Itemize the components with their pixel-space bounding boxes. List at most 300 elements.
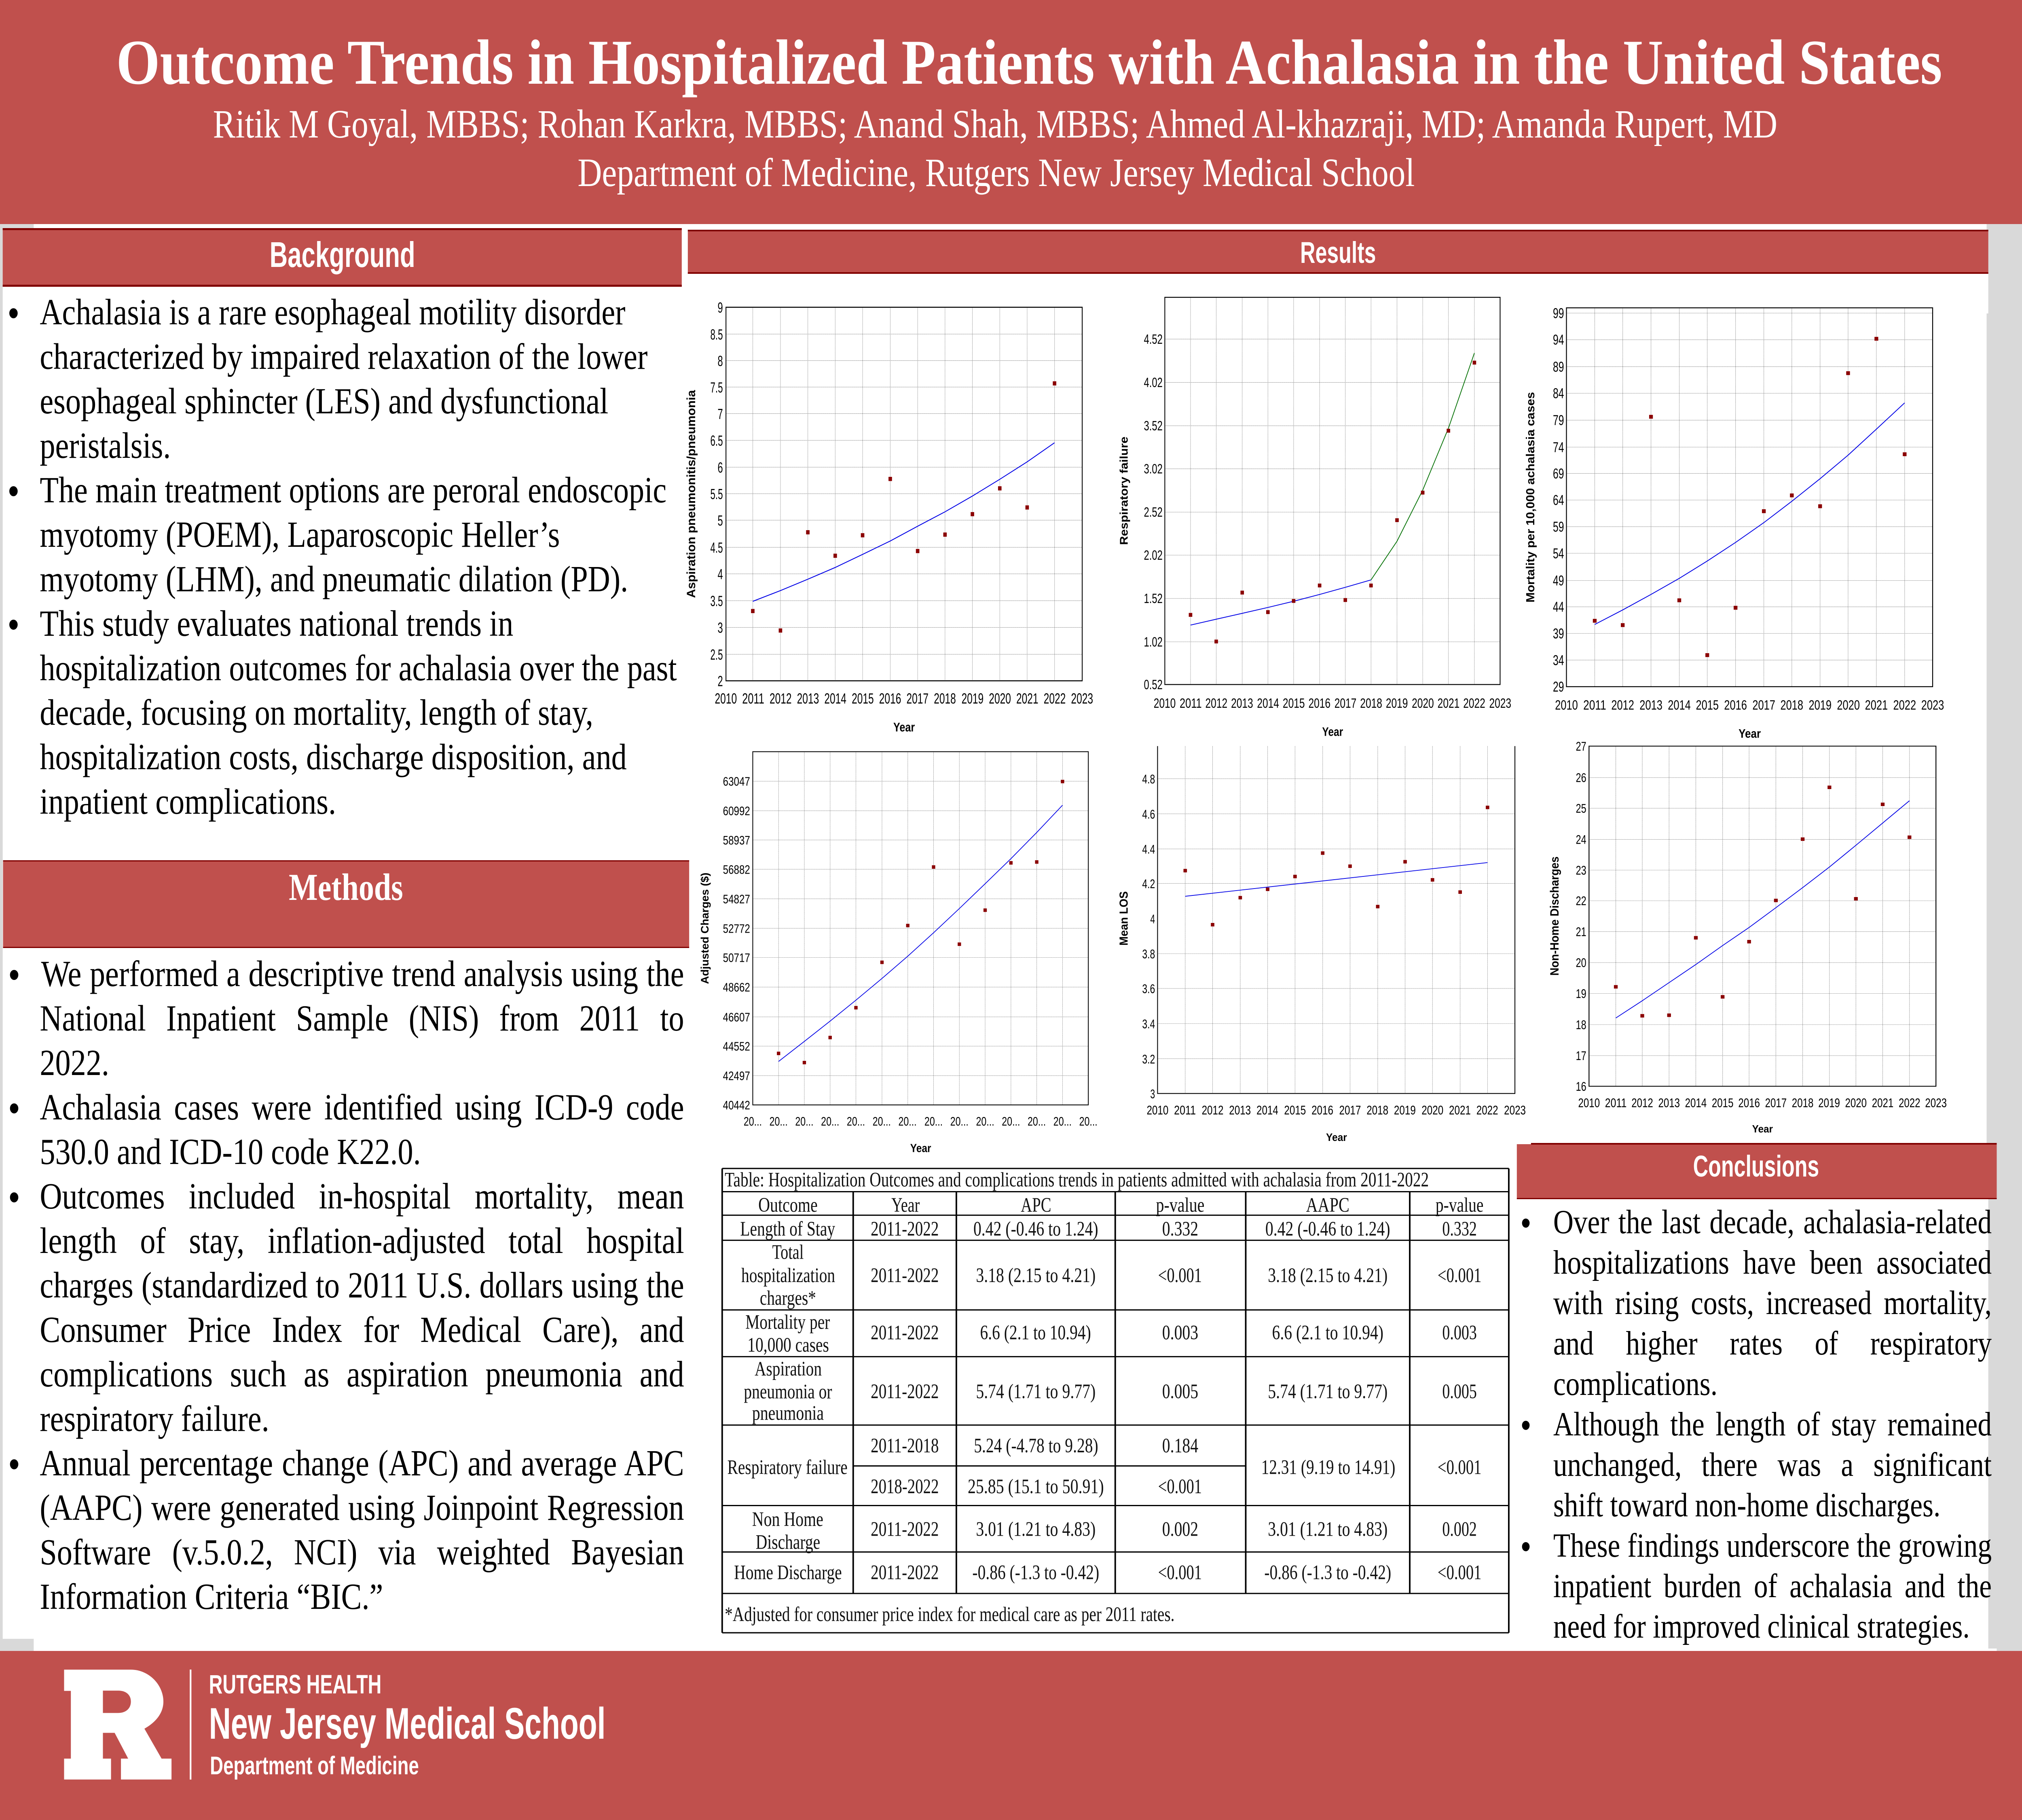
row: aspiration pneumonia: 0.005: [1162, 1380, 1198, 1403]
y axis title: Mortality per 10,000 achalasia cases: [1524, 392, 1537, 603]
x axis labels (truncated years): 20...: [924, 1114, 943, 1128]
text block: conclusions bullets: unchanged, there was a significant: [1553, 1446, 1992, 1483]
text block: background bullets: This study evaluates national trends in: [40, 603, 513, 644]
row: mortality: 6.6 (2.1 to 10.94): [1272, 1321, 1383, 1344]
y axis labels: 3.02: [1144, 461, 1163, 476]
x axis labels: 2018: [1781, 698, 1803, 713]
text block: methods bullets: complications such as aspiration pneumonia and: [40, 1353, 684, 1395]
logo divider: [190, 1670, 191, 1780]
row: total hospitalization charges: [741, 1241, 1481, 1309]
table: hospitalization outcomes and complication trends: p-value: [1436, 1194, 1483, 1217]
text block: methods bullets: Consumer Price Index for Medical Care), and: [40, 1309, 684, 1350]
x axis labels: 2021: [1872, 1096, 1893, 1110]
data points: [1595, 339, 1905, 655]
chart: mean length of stay: [1117, 746, 1526, 1143]
text block: background bullets: esophageal sphincter (LES) and dysfunctional: [40, 380, 608, 421]
text block: background bullets: hospitalization costs, discharge disposition, and: [40, 736, 627, 777]
y axis labels: 50717: [723, 951, 750, 965]
x axis labels: 2021: [1865, 698, 1888, 713]
data points: [1185, 807, 1487, 925]
y axis labels: [1144, 332, 1163, 692]
y axis labels: 4.5: [710, 540, 723, 556]
y axis labels: 20: [1576, 955, 1586, 970]
y axis labels: 17: [1576, 1048, 1586, 1063]
x axis title: Year: [1739, 727, 1761, 741]
text block: conclusions bullets: •: [1521, 1528, 1531, 1565]
row: mortality: 2011-2022: [871, 1321, 939, 1344]
y axis labels: 4: [1150, 912, 1155, 926]
x axis labels: 2022: [1899, 1096, 1920, 1110]
y axis labels: 5.5: [710, 486, 723, 503]
x axis labels: 2014: [1685, 1096, 1707, 1110]
y axis labels: 26: [1576, 770, 1586, 785]
logo text: [209, 1669, 606, 1780]
y axis labels: 3: [1150, 1086, 1155, 1101]
y axis labels: 89: [1553, 359, 1564, 375]
text block: conclusions bullets: need for improved clinical strategies.: [1553, 1608, 1970, 1645]
text block: methods bullets: Achalasia cases were identified using ICD-9 code: [40, 1086, 684, 1128]
x axis labels: [715, 691, 1093, 707]
x axis labels: 2018: [1366, 1103, 1388, 1117]
row: aspiration pneumonia: pneumonia: [752, 1402, 824, 1424]
x axis labels: [1578, 1096, 1947, 1110]
row: total hospitalization charges: hospitalization: [741, 1264, 835, 1287]
x axis labels (truncated years): [744, 1114, 1098, 1128]
column headers: [758, 1194, 1483, 1217]
y axis labels: 49: [1553, 573, 1564, 589]
x axis labels: 2010: [1578, 1096, 1600, 1110]
text block: conclusions bullets: with rising costs, increased mortality,: [1553, 1284, 1992, 1321]
y axis labels: 4.8: [1142, 772, 1155, 786]
row: mortality: [745, 1311, 1477, 1357]
text block: background bullets: Achalasia is a rare esophageal motility disorder: [40, 291, 626, 332]
y axis labels: 0.52: [1144, 677, 1163, 692]
text block: methods bullets: 530.0 and ICD-10 code K22.0.: [40, 1131, 421, 1172]
x axis labels: 2023: [1071, 691, 1093, 707]
y axis labels: 56882: [723, 863, 750, 876]
y axis labels: 6.5: [710, 433, 723, 449]
text block: background bullets: hospitalization outcomes for achalasia over the past: [40, 647, 677, 688]
x axis labels: 2014: [1256, 1103, 1278, 1117]
data points: [778, 781, 1062, 1062]
x axis labels: 2012: [1611, 698, 1634, 713]
y axis labels: 4.6: [1142, 807, 1155, 821]
x axis labels: 2018: [1360, 695, 1382, 711]
heading: background: Background: [270, 235, 415, 275]
y axis labels: 59: [1553, 519, 1564, 535]
x axis labels: 2023: [1504, 1103, 1526, 1117]
y axis labels: 42497: [723, 1069, 750, 1083]
table: hospitalization outcomes and complication trends: 0.005: [1442, 1380, 1477, 1403]
y axis labels: 1.02: [1144, 635, 1163, 650]
y axis labels: 4.2: [1142, 876, 1155, 891]
table: hospitalization outcomes and complication trends: [722, 1168, 1509, 1633]
row: length of stay: 0.332: [1162, 1218, 1198, 1240]
x axis labels: 2013: [1639, 698, 1662, 713]
text block: conclusions bullets: These findings underscore the growing: [1553, 1527, 1992, 1564]
text block: background bullets: characterized by impaired relaxation of the lower: [40, 336, 647, 377]
x axis labels: 2015: [1696, 698, 1719, 713]
x axis labels: 2014: [1668, 698, 1691, 713]
logo text: New Jersey Medical School: [209, 1699, 606, 1748]
chart: adjusted charges: [698, 752, 1098, 1154]
chart: respiratory failure: [1118, 297, 1511, 739]
row: home discharge: -0.86 (-1.3 to -0.42): [972, 1561, 1099, 1584]
y axis labels: 18: [1576, 1018, 1586, 1032]
y axis labels: 9: [717, 300, 723, 316]
y axis labels: 21: [1576, 925, 1586, 939]
y axis labels: 3.6: [1142, 982, 1155, 996]
heading: conclusions: [1517, 1143, 1997, 1199]
x axis labels: 2021: [1449, 1103, 1471, 1117]
row: mortality: 10,000 cases: [747, 1334, 829, 1357]
y axis labels: 3: [717, 620, 723, 636]
x axis labels (truncated years): 20...: [1053, 1114, 1072, 1128]
text block: background bullets: inpatient complications.: [40, 781, 336, 822]
x axis labels: 2020: [1412, 695, 1434, 711]
row: respiratory failure: <0.001: [1158, 1475, 1202, 1498]
row: mortality: Mortality per: [745, 1311, 830, 1333]
y axis labels: 64: [1553, 493, 1564, 508]
x axis labels (truncated years): 20...: [1079, 1114, 1098, 1128]
text block: conclusions bullets: •: [1521, 1204, 1531, 1242]
x axis labels: 2020: [1421, 1103, 1443, 1117]
row: aspiration pneumonia: [744, 1358, 1477, 1424]
x axis labels: 2021: [1016, 691, 1038, 707]
icon: Rutgers R logo: [64, 1670, 171, 1780]
x axis labels: 2015: [1712, 1096, 1733, 1110]
grey slide background strips: [0, 224, 2022, 1651]
x axis labels (truncated years): 20...: [744, 1114, 762, 1128]
row: non home discharge: [752, 1508, 1477, 1553]
x axis labels: 2022: [1463, 695, 1485, 711]
row: aspiration pneumonia: Aspiration: [755, 1358, 822, 1380]
x axis labels: 2022: [1044, 691, 1066, 707]
x axis labels: 2019: [1386, 695, 1408, 711]
y axis labels: 54827: [723, 892, 750, 906]
x axis labels: [1146, 1103, 1526, 1117]
y axis labels: 2.5: [710, 647, 723, 663]
data points: [1616, 787, 1910, 1016]
heading: background: [3, 228, 682, 287]
row: respiratory failure: 25.85 (15.1 to 50.91): [968, 1475, 1104, 1498]
y axis labels: [1142, 772, 1155, 1101]
x axis labels: 2017: [1752, 698, 1775, 713]
text block: background bullets: myotomy (LHM), and pneumatic dilation (PD).: [40, 558, 628, 599]
y axis labels: [723, 775, 750, 1112]
heading: results: Results: [1300, 236, 1376, 269]
y axis labels: 4.02: [1144, 375, 1163, 390]
x axis labels (truncated years): 20...: [1002, 1114, 1020, 1128]
row: length of stay: 2011-2022: [871, 1218, 939, 1240]
trend line 2018-2022: [1371, 353, 1474, 580]
x axis labels: 2011: [742, 691, 764, 707]
x axis labels: 2012: [770, 691, 792, 707]
data points: [1191, 363, 1474, 641]
row: length of stay: 0.42 (-0.46 to 1.24): [973, 1218, 1098, 1240]
row: mortality: 0.003: [1162, 1321, 1198, 1344]
text block: conclusions bullets: and higher rates of respiratory: [1553, 1325, 1992, 1362]
row: aspiration pneumonia: pneumonia or: [744, 1380, 832, 1403]
y axis labels: 39: [1553, 626, 1564, 642]
x axis labels: 2010: [1555, 698, 1578, 713]
y axis labels: 34: [1553, 653, 1564, 668]
x axis labels: 2018: [934, 691, 956, 707]
x axis labels: 2023: [1921, 698, 1944, 713]
x axis labels: 2011: [1174, 1103, 1196, 1117]
y axis labels: [1553, 306, 1564, 695]
y axis labels: 24: [1576, 832, 1586, 847]
x axis labels: 2015: [852, 691, 874, 707]
y axis labels: 3.52: [1144, 419, 1163, 434]
row: home discharge: Home Discharge: [734, 1561, 842, 1584]
x axis labels: 2016: [1724, 698, 1747, 713]
y axis labels: 25: [1576, 801, 1586, 815]
x axis labels: 2011: [1583, 698, 1606, 713]
row: respiratory failure: Respiratory failure: [728, 1456, 848, 1479]
x axis labels: 2017: [906, 691, 929, 707]
x axis labels (truncated years): 20...: [795, 1114, 814, 1128]
y axis labels: 7: [717, 406, 723, 422]
text block: background bullets: •: [8, 292, 19, 334]
column headers: p-value: [1156, 1194, 1204, 1217]
row: home discharge: 2011-2022: [871, 1561, 939, 1584]
x axis labels: 2021: [1438, 695, 1459, 711]
x axis labels: [1154, 695, 1511, 711]
x axis labels: 2014: [1257, 695, 1279, 711]
x axis labels: 2010: [1146, 1103, 1168, 1117]
text block: conclusions bullets: complications.: [1553, 1365, 1717, 1402]
y axis labels: 74: [1553, 440, 1564, 455]
x axis title: Year: [910, 1142, 931, 1154]
x axis labels: 2022: [1476, 1103, 1498, 1117]
text block: methods bullets: •: [9, 1177, 19, 1218]
x axis labels (truncated years): 20...: [847, 1114, 865, 1128]
x axis labels: 2020: [1837, 698, 1860, 713]
x axis labels: 2019: [962, 691, 984, 707]
x axis title: Year: [1326, 1131, 1347, 1143]
text block: methods bullets: (AAPC) were generated using Joinpoint Regression: [40, 1487, 684, 1528]
table: hospitalization outcomes and complication trends: 0.332: [1442, 1218, 1477, 1240]
row: home discharge: <0.001: [1158, 1561, 1202, 1584]
x axis labels: 2012: [1202, 1103, 1223, 1117]
x axis labels: 2017: [1335, 695, 1356, 711]
header band: [0, 0, 2022, 224]
y axis labels: 6: [717, 460, 723, 476]
y axis labels: 8.5: [710, 327, 723, 343]
trend line: [778, 805, 1062, 1061]
x axis labels (truncated years): 20...: [950, 1114, 969, 1128]
row: length of stay: 0.42 (-0.46 to 1.24): [1265, 1218, 1390, 1240]
row: non home discharge: Discharge: [756, 1531, 820, 1553]
text block: conclusions bullets: shift toward non-home discharges.: [1553, 1486, 1940, 1524]
y axis labels: 84: [1553, 386, 1564, 402]
heading: methods: [3, 860, 689, 948]
y axis labels: 16: [1576, 1079, 1586, 1094]
y axis labels: 7.5: [710, 380, 723, 396]
y axis labels: 48662: [723, 980, 750, 995]
table: hospitalization outcomes and complication trends: 0.003: [1442, 1321, 1477, 1344]
text block: background bullets: The main treatment options are peroral endoscopic: [40, 469, 666, 510]
row: total hospitalization charges: 3.18 (2.15 to 4.21): [1268, 1264, 1387, 1287]
x axis labels: 2016: [1311, 1103, 1333, 1117]
x axis labels: 2023: [1489, 695, 1511, 711]
x axis labels: 2013: [1229, 1103, 1251, 1117]
x axis labels: 2014: [824, 691, 846, 707]
table: hospitalization outcomes and complication trends: 0.002: [1442, 1518, 1477, 1541]
x axis labels (truncated years): 20...: [1028, 1114, 1046, 1128]
y axis labels: 44: [1553, 599, 1564, 615]
table: hospitalization outcomes and complication trends: <0.001: [1438, 1456, 1481, 1479]
row: home discharge: -0.86 (-1.3 to -0.42): [1264, 1561, 1391, 1584]
title: Outcome Trends in Hospitalized Patients with Achalasia in the United States: [116, 27, 1942, 98]
x axis labels: 2012: [1631, 1096, 1653, 1110]
y axis labels: 54: [1553, 546, 1564, 561]
x axis labels: 2022: [1893, 698, 1916, 713]
x axis labels: 2023: [1925, 1096, 1947, 1110]
heading: conclusions: Conclusions: [1693, 1150, 1819, 1183]
y axis title: Non-Home Discharges: [1548, 857, 1561, 976]
text block: methods bullets: National Inpatient Sample (NIS) from 2011 to: [40, 997, 684, 1039]
row: non home discharge: 3.01 (1.21 to 4.83): [1268, 1518, 1387, 1541]
text block: conclusions bullets: [1518, 1202, 1995, 1649]
y axis labels: 2.02: [1144, 548, 1163, 563]
trend line: [1616, 801, 1910, 1018]
y axis labels: 5: [717, 513, 723, 529]
y axis labels: 22: [1576, 893, 1586, 908]
trend line: [1185, 863, 1487, 896]
row: length of stay: Length of Stay: [740, 1218, 835, 1240]
text block: background bullets: •: [8, 470, 19, 512]
x axis labels: 2012: [1206, 695, 1227, 711]
row: non home discharge: 3.01 (1.21 to 4.83): [976, 1518, 1096, 1541]
x axis labels: 2020: [989, 691, 1011, 707]
row: home discharge: [734, 1561, 1481, 1584]
column headers: AAPC: [1306, 1194, 1349, 1217]
y axis labels: [710, 300, 723, 690]
x axis labels: 2015: [1283, 695, 1305, 711]
y axis labels: 19: [1576, 986, 1586, 1001]
y axis labels: 27: [1576, 739, 1586, 753]
text block: background bullets: [3, 290, 683, 823]
y axis labels: 2: [717, 673, 723, 690]
text block: methods bullets: Information Criteria “BIC.”: [40, 1576, 383, 1617]
x axis labels: 2013: [1231, 695, 1253, 711]
chart: aspiration pneumonitis/pneumonia: [684, 300, 1093, 734]
y axis labels: 44552: [723, 1039, 750, 1054]
text block: methods bullets: length of stay, inflation-adjusted total hospital: [40, 1220, 684, 1261]
x axis labels: 2016: [1738, 1096, 1760, 1110]
row: non home discharge: 0.002: [1162, 1518, 1198, 1541]
row: non home discharge: Non Home: [752, 1508, 823, 1531]
chart: non-home discharges: [1548, 739, 1947, 1135]
text block: methods bullets: respiratory failure.: [40, 1398, 269, 1439]
row: respiratory failure: 2018-2022: [871, 1475, 939, 1498]
text block: background bullets: myotomy (POEM), Laparoscopic Heller’s: [40, 514, 560, 555]
text block: methods bullets: •: [9, 1443, 19, 1485]
y axis labels: [1576, 739, 1586, 1094]
row: total hospitalization charges: 2011-2022: [871, 1264, 939, 1287]
trend line: [1595, 403, 1905, 624]
text block: methods bullets: We performed a descriptive trend analysis using the: [41, 953, 684, 994]
text block: conclusions bullets: Over the last decade, achalasia-related: [1553, 1203, 1992, 1240]
x axis labels: 2011: [1605, 1096, 1626, 1110]
x axis labels: 2010: [715, 691, 737, 707]
row: total hospitalization charges: charges*: [760, 1287, 816, 1309]
x axis labels: 2019: [1808, 698, 1832, 713]
text block: methods bullets: Outcomes included in-hospital mortality, mean: [40, 1175, 684, 1217]
trend line: [753, 443, 1055, 601]
text block: methods bullets: 2022.: [40, 1042, 109, 1083]
y axis labels: 63047: [723, 775, 750, 789]
heading: results: [688, 230, 1988, 274]
row: total hospitalization charges: Total: [772, 1241, 804, 1263]
row: respiratory failure: 12.31 (9.19 to 14.91): [1261, 1456, 1395, 1479]
y axis labels: 40442: [723, 1098, 750, 1112]
row: aspiration pneumonia: 5.74 (1.71 to 9.77): [976, 1380, 1096, 1403]
text block: background bullets: decade, focusing on mortality, length of stay,: [40, 692, 593, 733]
y axis labels: 52772: [723, 922, 750, 935]
row: respiratory failure: [728, 1434, 1481, 1498]
y axis labels: 1.52: [1144, 591, 1163, 606]
data points: [753, 383, 1055, 631]
footer band: [0, 1651, 2022, 1820]
y axis labels: 99: [1553, 306, 1564, 321]
x axis labels: 2010: [1154, 695, 1176, 711]
y axis labels: 46607: [723, 1010, 750, 1024]
x axis labels: 2018: [1792, 1096, 1813, 1110]
row: total hospitalization charges: 3.18 (2.15 to 4.21): [976, 1264, 1096, 1287]
y axis labels: 23: [1576, 863, 1586, 877]
y axis labels: 69: [1553, 466, 1564, 482]
x axis labels (truncated years): 20...: [821, 1114, 839, 1128]
y axis title: Respiratory failure: [1118, 436, 1130, 545]
y axis title: Adjusted Charges ($): [698, 873, 711, 984]
y axis labels: 29: [1553, 679, 1564, 695]
y axis labels: 4.4: [1142, 842, 1155, 857]
y axis labels: 8: [717, 353, 723, 369]
table: hospitalization outcomes and complication trends: <0.001: [1438, 1561, 1481, 1584]
x axis labels: [1555, 698, 1944, 713]
x axis title: Year: [893, 720, 915, 734]
row: mortality: 6.6 (2.1 to 10.94): [980, 1321, 1091, 1344]
text block: methods bullets: •: [9, 1088, 19, 1129]
row: aspiration pneumonia: 5.74 (1.71 to 9.77): [1268, 1380, 1387, 1403]
x axis title: Year: [1322, 725, 1343, 739]
x axis labels: 2011: [1180, 695, 1202, 711]
row: respiratory failure: 0.184: [1162, 1434, 1198, 1457]
trend line 2011-2018: [1191, 580, 1371, 625]
y axis labels: 4: [717, 567, 723, 583]
table: hospitalization outcomes and complication trends: <0.001: [1438, 1264, 1481, 1287]
text block: conclusions bullets: hospitalizations have been associated: [1553, 1244, 1992, 1281]
text block: methods bullets: Annual percentage change (APC) and average APC: [40, 1442, 684, 1484]
x axis labels: 2017: [1339, 1103, 1361, 1117]
text block: background bullets: peristalsis.: [40, 425, 171, 466]
x axis labels (truncated years): 20...: [976, 1114, 994, 1128]
logo text: RUTGERS HEALTH: [209, 1669, 381, 1699]
y axis title: Aspiration pneumonitis/pneumonia: [684, 390, 698, 598]
department: Department of Medicine, Rutgers New Jersey Medical School: [577, 150, 1415, 195]
text block: methods bullets: •: [9, 954, 19, 995]
x axis labels: 2017: [1765, 1096, 1787, 1110]
chart: mortality per 10,000 achalasia cases: [1524, 306, 1944, 741]
row: respiratory failure: 2011-2018: [871, 1434, 939, 1457]
y axis labels: 3.5: [710, 593, 723, 609]
table: hospitalization outcomes and complication trends: *Adjusted for consumer price index for medical care as per 2011 rates.: [725, 1603, 1174, 1626]
x axis title: Year: [1752, 1123, 1773, 1135]
text block: conclusions bullets: Although the length of stay remained: [1553, 1405, 1992, 1443]
